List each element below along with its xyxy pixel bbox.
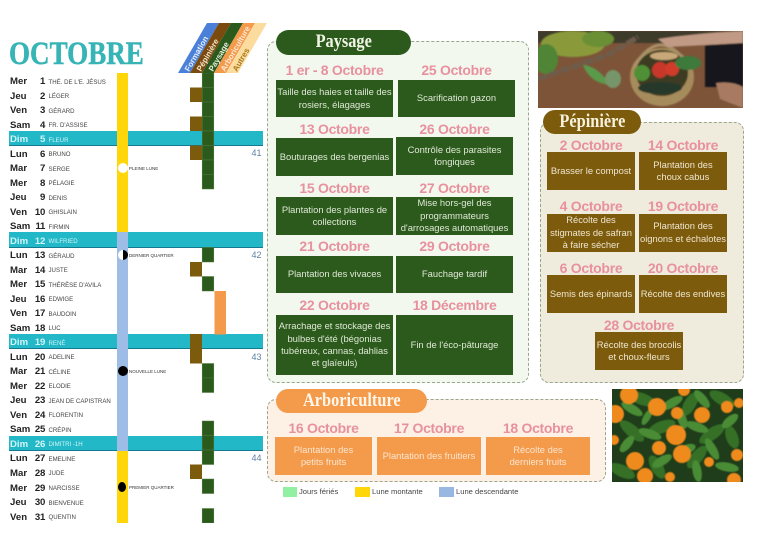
calendar day list: QUENTIN: [48, 514, 76, 521]
calendar day list: 17: [35, 308, 45, 319]
calendar day list: 1: [40, 76, 45, 87]
calendar day list: Mer: [10, 482, 27, 494]
date: 22 Octobre: [299, 297, 370, 313]
calendar day list: Mar: [10, 366, 27, 377]
calendar day list: JEAN DE CAPISTRAN: [48, 398, 111, 405]
calendar day list: 2: [40, 90, 45, 102]
date: 1 er - 8 Octobre: [286, 62, 383, 78]
calendar day list: JUSTE: [48, 267, 68, 274]
calendar day list: Ven: [10, 410, 27, 421]
date: 21 Octobre: [299, 238, 370, 254]
task: Mise hors-gel des: [418, 197, 492, 208]
task: Plantation des vivaces: [288, 268, 381, 279]
calendar day list: Mar: [10, 265, 27, 276]
calendar day list: Ven: [10, 105, 27, 116]
task: [547, 214, 635, 252]
calendar day list: ELODIE: [48, 383, 71, 390]
label: dernier quartier: DERNIER QUARTIER: [129, 252, 174, 258]
calendar day list: Mer: [10, 76, 27, 87]
calendar day list: 10: [35, 207, 45, 218]
calendar day list: GÉRARD: [48, 108, 75, 114]
date: 15 Octobre: [299, 180, 370, 196]
calendar day list: 4: [40, 120, 45, 130]
task: [639, 275, 727, 313]
task: [547, 275, 635, 313]
task: Arrachage et stockage des: [279, 320, 390, 331]
date: 27 Octobre: [419, 180, 490, 196]
label: nouvelle lune: NOUVELLE LUNE: [129, 368, 166, 374]
calendar day list: 3: [40, 105, 45, 116]
calendar day list: 12: [35, 236, 45, 247]
calendar day list: 18: [35, 323, 45, 334]
calendar day list: 31: [35, 512, 45, 522]
calendar day list: 22: [35, 381, 45, 392]
moon: nouvelle lune: [118, 366, 128, 376]
calendar header: activity categories: Pépinière: [195, 37, 221, 73]
date: 18 Décembre: [413, 297, 496, 313]
calendar day list: 9: [40, 192, 45, 203]
calendar day list: 20: [35, 352, 45, 363]
calendar header: activity categories: Arboriculture: [219, 24, 252, 73]
title: OCTOBRE: OCTOBRE: [9, 36, 144, 72]
Sunday band 5: [8, 130, 263, 146]
calendar day list: BRUNO: [48, 151, 71, 158]
calendar header: activity categories: Autres: [231, 46, 252, 73]
Sunday band 26: [8, 436, 263, 451]
task: oignons et échalotes: [640, 232, 726, 244]
task: Plantation des fruitiers: [383, 450, 475, 461]
heading: Pépinière: [543, 110, 641, 134]
task: Contrôle des parasites: [408, 144, 501, 155]
calendar day list: 27: [35, 453, 45, 464]
calendar day list: THÉRÈSE D'AVILA: [48, 282, 101, 289]
task: [396, 197, 513, 235]
calendar day list: RENÉ: [48, 340, 65, 347]
task: fongiques: [434, 156, 475, 167]
task: [276, 138, 393, 176]
calendar day list: Jeu: [10, 294, 27, 305]
panel: Paysage: [267, 41, 529, 383]
Sunday band 19: [8, 334, 263, 349]
calendar day list: Mar: [10, 163, 27, 174]
calendar day list: Ven: [10, 207, 27, 218]
label: pleine lune: PLEINE LUNE: [129, 166, 158, 170]
calendar day list: Sam: [10, 323, 30, 334]
calendar day list: Sam: [10, 424, 30, 435]
calendar day list: Jeu: [10, 395, 27, 406]
calendar day list: PÉLAGIE: [48, 180, 75, 187]
calendar day list: LUC: [48, 325, 61, 332]
date: 14 Octobre: [648, 137, 718, 153]
panel: Arboriculture: [267, 399, 606, 482]
task: [396, 256, 513, 293]
calendar day list: Dim: [10, 439, 28, 450]
date: 18 Octobre: [503, 420, 573, 436]
task: stigmates de safran: [550, 227, 632, 238]
task: et choux-fleurs: [608, 351, 670, 362]
heading: Pépinière: Pépinière: [559, 111, 625, 132]
heading: Arboriculture: [276, 389, 427, 413]
task: [595, 332, 683, 370]
task: tubéreux, cannas, dahlias: [281, 345, 388, 356]
moon: dernier quartier: [118, 250, 128, 260]
week number 44: 44: [251, 453, 262, 463]
task: bulbes d'été (bégonias: [287, 333, 382, 344]
calendar day list: Sam: [10, 221, 30, 232]
calendar day list: FLEUR: [48, 136, 68, 144]
calendar day list: 21: [35, 366, 45, 377]
calendar day list: EMELINE: [48, 456, 75, 463]
calendar day list: GÉRAUD: [48, 253, 75, 260]
date: 28 Octobre: [604, 317, 674, 333]
calendar day list: [10, 76, 111, 522]
calendar day list: 16: [35, 294, 45, 305]
date: 29 Octobre: [419, 238, 490, 254]
date: 25 Octobre: [421, 62, 492, 78]
calendar day list: Lun: [10, 352, 28, 363]
calendar day list: SERGE: [48, 166, 70, 173]
task: d'arrosages automatiques: [401, 222, 508, 233]
task: Taille des haies et taille des: [277, 86, 392, 97]
task: [377, 437, 481, 475]
task: Bouturages des bergenias: [280, 151, 389, 162]
calendar day list: BIENVENUE: [48, 500, 84, 506]
task: Récolte des brocolis: [597, 339, 681, 350]
panel: Pépinière: [540, 122, 744, 383]
calendar day list: 8: [40, 178, 45, 189]
calendar day list: 29: [35, 482, 45, 494]
task: [639, 152, 727, 190]
date: 19 Octobre: [648, 198, 718, 214]
date: 26 Octobre: [419, 121, 490, 137]
calendar day list: 15: [35, 279, 45, 290]
task: Récolte des endives: [641, 288, 725, 299]
heading: Paysage: Paysage: [315, 31, 372, 52]
calendar day list: Ven: [10, 512, 27, 522]
calendar day list: Mer: [10, 178, 27, 189]
calendar day list: 25: [35, 424, 45, 435]
calendar day list: FLORENTIN: [48, 412, 83, 419]
task: [276, 256, 393, 293]
calendar day list: 26: [35, 439, 45, 450]
task: [486, 437, 590, 475]
task: [547, 152, 635, 190]
calendar day list: 7: [40, 163, 45, 174]
calendar day list: JUDE: [48, 470, 64, 477]
calendar day list: Dim: [10, 134, 28, 145]
calendar day list: LÉGER: [48, 93, 69, 100]
date: 17 Octobre: [394, 420, 464, 436]
calendar day list: 23: [35, 395, 45, 406]
legend: jours fériés, lune montante, lune descendante: Lune descendante: [456, 487, 518, 496]
calendar day list: 19: [35, 337, 45, 348]
calendar day list: DENIS: [48, 195, 67, 202]
task: Plantation des plantes de: [282, 204, 387, 215]
calendar day list: Dim: [10, 236, 28, 247]
calendar day list: Jeu: [10, 90, 27, 102]
calendar day list: 5: [40, 134, 45, 145]
task: [396, 137, 513, 175]
week number 41: 41: [251, 148, 262, 158]
photo: orange tree: [612, 389, 743, 482]
calendar day list: 30: [35, 497, 45, 508]
calendar day list: Jeu: [10, 497, 27, 508]
calendar day list: 24: [35, 410, 45, 421]
date: 6 Octobre: [560, 260, 622, 276]
date: 20 Octobre: [648, 260, 718, 276]
date: 16 Octobre: [288, 420, 359, 436]
date: 13 Octobre: [299, 121, 370, 137]
task: [398, 80, 515, 117]
legend: jours fériés, lune montante, lune descendante: Lune montante: [372, 487, 423, 496]
date: 4 Octobre: [560, 198, 622, 214]
task: Plantation des: [653, 220, 713, 231]
calendar day list: EDWIGE: [48, 296, 73, 303]
task: rosiers, élagages: [299, 98, 370, 110]
calendar day list: 28: [35, 468, 45, 479]
task: et glaïeuls): [312, 357, 357, 368]
moon phase bar: [117, 73, 128, 523]
calendar header: activity categories: Formation: [183, 35, 210, 73]
calendar day list: FIRMIN: [48, 224, 70, 231]
task: [276, 315, 393, 375]
calendar day list: Sam: [10, 120, 30, 130]
week number 43: 43: [251, 352, 262, 362]
calendar header: activity categories: Paysage: [207, 40, 231, 73]
legend: jours fériés, lune montante, lune descendante: [283, 487, 518, 497]
task: programmateurs: [420, 210, 489, 221]
calendar header: activity categories: [178, 23, 267, 73]
calendar day list: Mar: [10, 468, 27, 479]
calendar day list: Dim: [10, 337, 28, 348]
task: [275, 437, 372, 475]
calendar day list: Mer: [10, 381, 27, 392]
calendar day list: DIMITRI -1H: [48, 441, 83, 448]
task: choux cabus: [657, 171, 709, 182]
photo: basket of vegetables in a garden: [538, 31, 743, 108]
calendar day list: CÉLINE: [48, 369, 71, 376]
task: [639, 214, 727, 252]
heading: Paysage: [276, 30, 411, 55]
task: [276, 197, 393, 235]
calendar day list: Lun: [10, 250, 28, 261]
Sunday band 12: [8, 232, 263, 248]
task: Plantation des: [294, 444, 353, 455]
calendar day list: BAUDOIN: [48, 311, 76, 318]
activity grid: [190, 73, 226, 523]
date: 2 Octobre: [560, 137, 622, 153]
task: Récolte des: [513, 444, 563, 455]
moon: pleine lune: [118, 163, 128, 173]
calendar day list: CRÉPIN: [48, 427, 72, 434]
task: Scarification gazon: [417, 92, 496, 103]
calendar day list: Ven: [10, 308, 27, 319]
task: Brasser le compost: [551, 165, 631, 176]
calendar day list: Mer: [10, 279, 27, 290]
task: Fauchage tardif: [422, 268, 487, 279]
task: derniers fruits: [510, 456, 566, 467]
task: collections: [313, 216, 356, 227]
calendar day list: GHISLAIN: [48, 209, 77, 216]
week number 42: 42: [251, 250, 262, 260]
legend: jours fériés, lune montante, lune descendante: Jours fériés: [299, 487, 338, 496]
task: Récolte des: [566, 214, 616, 225]
calendar day list: ADELINE: [48, 354, 75, 361]
calendar day list: 6: [40, 149, 45, 160]
task: à faire sécher: [563, 239, 619, 250]
task: petits fruits: [301, 456, 346, 467]
calendar day list: FR. D'ASSISE: [48, 122, 88, 129]
calendar day list: Lun: [10, 149, 28, 160]
calendar day list: THÉ. DE L'E. JÉSUS: [48, 78, 106, 86]
moon: premier quartier: [118, 482, 126, 492]
heading: Arboriculture: Arboriculture: [303, 390, 400, 411]
task: Semis des épinards: [550, 288, 632, 299]
label: premier quartier: PREMIER QUARTIER: [129, 484, 174, 490]
calendar day list: 13: [35, 250, 45, 261]
calendar day list: 14: [35, 265, 45, 276]
calendar day list: Lun: [10, 453, 28, 464]
task: Plantation des: [653, 159, 713, 170]
calendar day list: NARCISSE: [48, 485, 80, 492]
calendar day list: 11: [35, 221, 45, 232]
calendar day list: Jeu: [10, 192, 27, 203]
calendar day list: WILFRIED: [48, 238, 78, 245]
task: [396, 315, 513, 375]
task: [276, 80, 393, 117]
task: Fin de l'éco-pâturage: [411, 339, 498, 350]
